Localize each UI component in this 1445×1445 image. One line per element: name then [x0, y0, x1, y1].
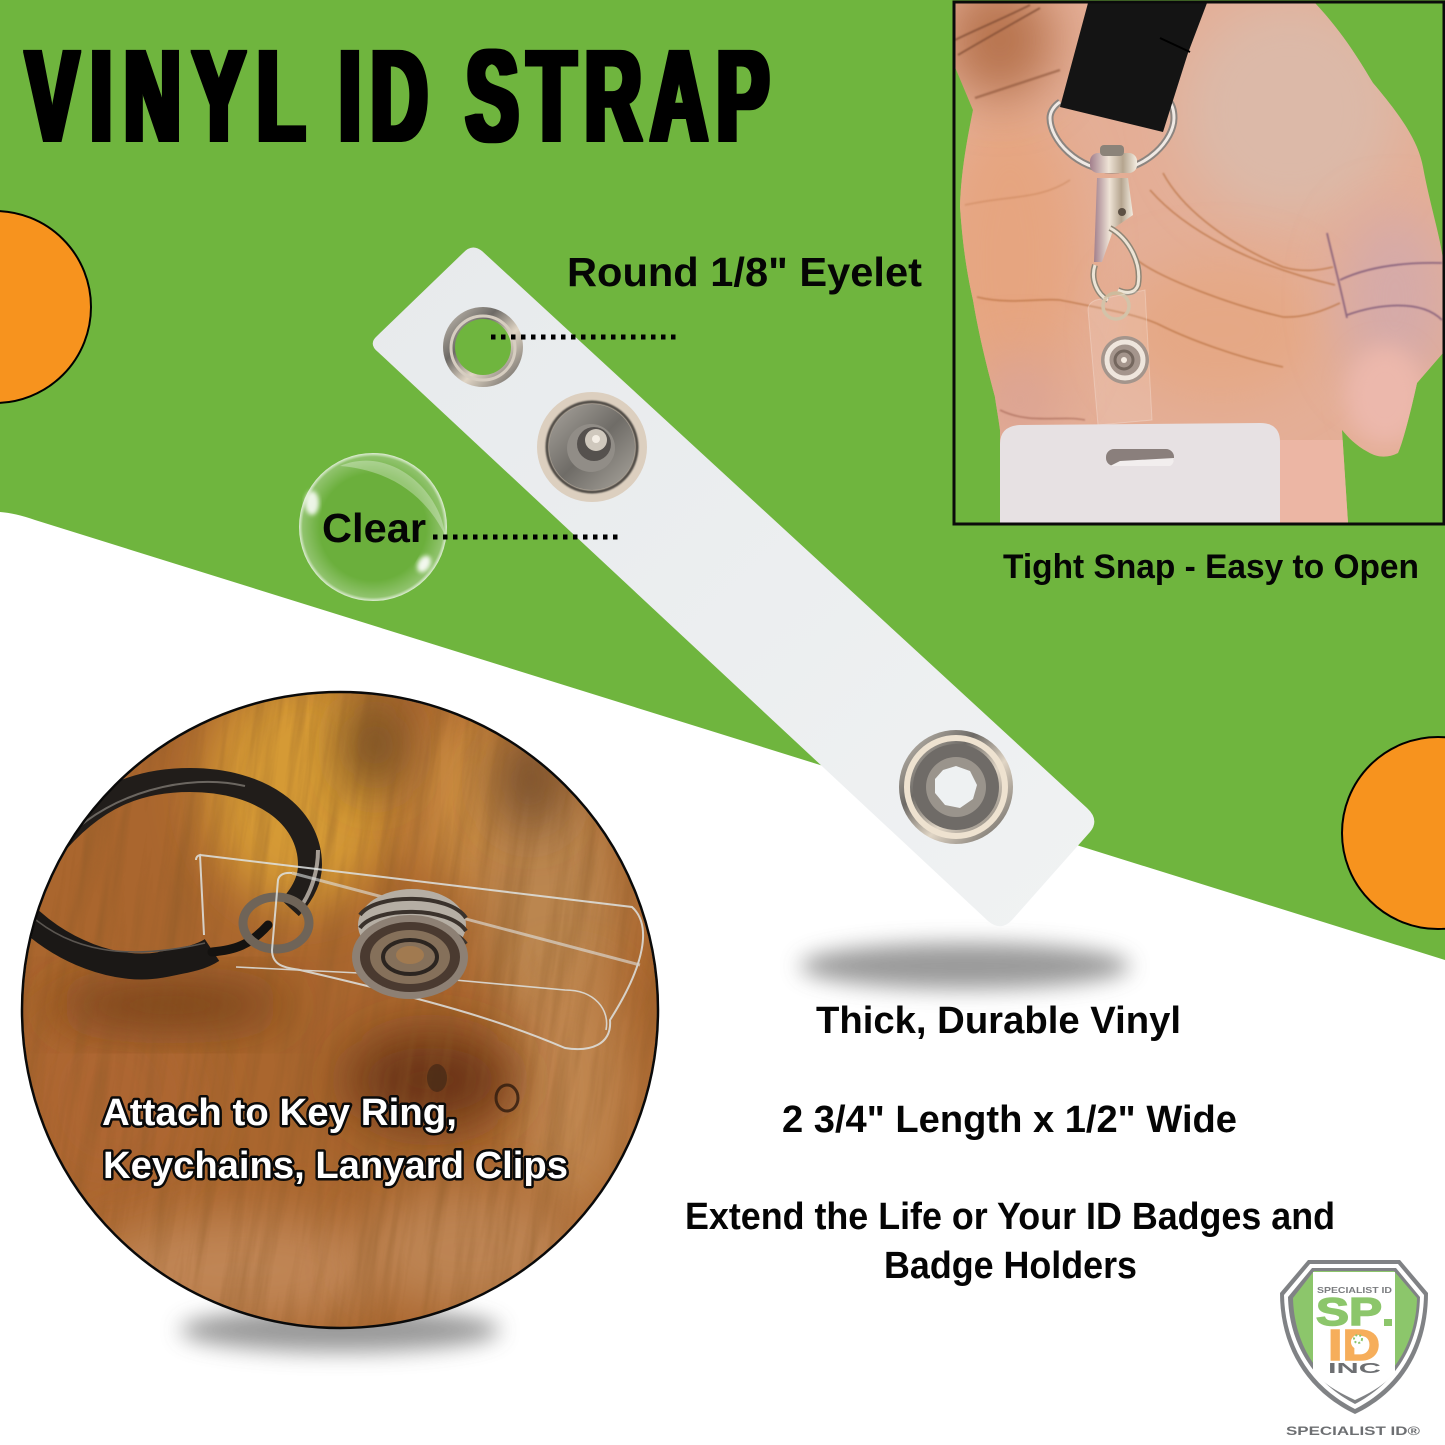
logo: Specialist ID shield: INC: [1328, 1360, 1381, 1377]
features text block: [685, 1000, 1335, 1287]
background: green diagonal panel: [0, 0, 1445, 960]
shadow under photo circle: [180, 1308, 500, 1352]
logo wordmark: SPECIALIST ID®: [1286, 1426, 1421, 1438]
black key ring: [15, 780, 318, 967]
label: clear: Clear: [322, 505, 426, 551]
decorative orange circle left: [0, 211, 91, 403]
shield: [1280, 1260, 1428, 1414]
photo caption: Keychains, Lanyard Clips: [103, 1145, 568, 1187]
snap on vinyl strap: [1101, 336, 1149, 384]
clear vinyl strap on palm: [1088, 290, 1152, 425]
logo: Specialist ID shield: SP: [1316, 1291, 1382, 1334]
title: VINYL: [26, 22, 305, 169]
wood background: [23, 693, 657, 1327]
strap body: [373, 247, 1094, 926]
round eyelet: [443, 307, 523, 387]
features text block: Badge Holders: [884, 1245, 1137, 1287]
title: STRAP: [466, 22, 769, 169]
soft shadow under strap: [800, 943, 1130, 989]
title: ID: [339, 22, 428, 169]
photo caption: [102, 1092, 568, 1187]
metal snap stack: [352, 889, 468, 999]
black lanyard strap: [1050, 3, 1207, 170]
split ring: [243, 897, 309, 949]
snap socket: [899, 730, 1013, 844]
photo: hand holding lanyard with vinyl strap: [940, 0, 1445, 530]
vinyl strap product: [373, 247, 1094, 926]
features text block: Extend the Life or Your ID Badges and: [685, 1196, 1335, 1238]
circle outline: [22, 692, 658, 1328]
features text block: Thick, Durable Vinyl: [816, 1000, 1181, 1042]
logo: Specialist ID shield: SPECIALIST ID: [1317, 1285, 1392, 1295]
logo: Specialist ID shield: ID: [1328, 1321, 1380, 1370]
snap stud: [537, 392, 647, 502]
hand: [940, 0, 1445, 530]
swivel clasp: [1090, 145, 1139, 319]
features text block: 2 3/4" Length x 1/2" Wide: [782, 1099, 1237, 1141]
bubble: clear: [299, 453, 447, 601]
title: [26, 22, 769, 169]
logo: Specialist ID shield: [1280, 1260, 1428, 1414]
label: round eyelet: Round 1/8" Eyelet: [567, 249, 922, 295]
photo circle: strap on key ring over wood: [20, 690, 660, 1330]
decorative orange circle right: [1342, 737, 1445, 929]
clear vinyl outline: [196, 855, 643, 1049]
leader line: clear: [433, 534, 621, 540]
caption: tight snap: Tight Snap - Easy to Open: [1003, 548, 1419, 586]
photo frame: [954, 2, 1444, 524]
white ID card with slot: [1000, 423, 1280, 525]
photo caption: Attach to Key Ring,: [102, 1092, 457, 1134]
palm creases: [965, 173, 1340, 420]
leader line: eyelet: [491, 334, 679, 340]
